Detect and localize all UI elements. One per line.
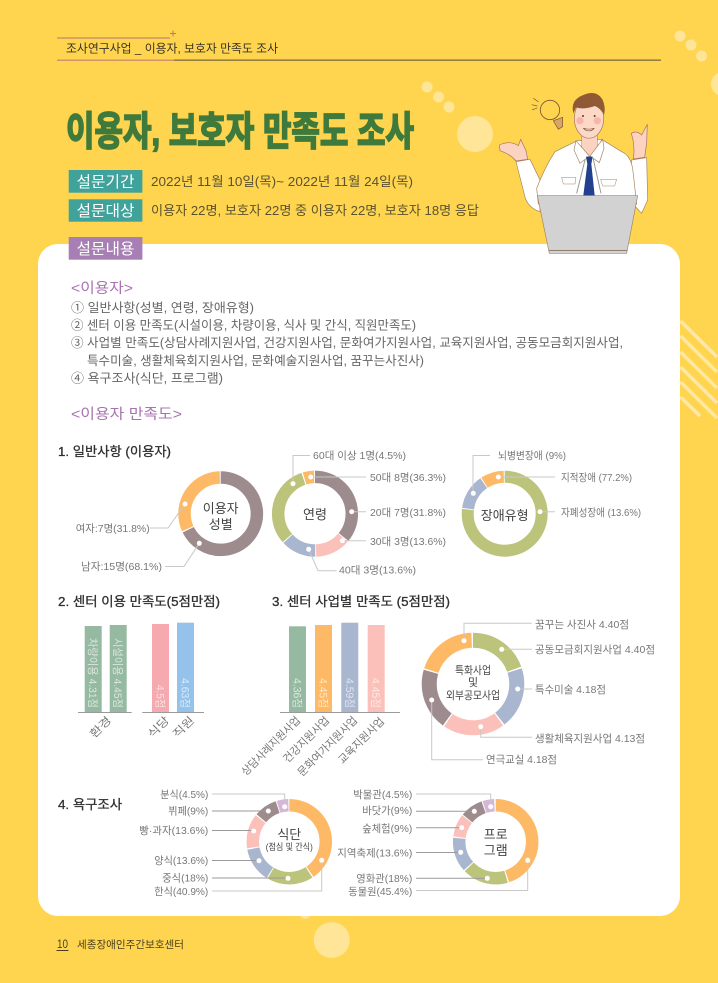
footer: 10 (57, 939, 68, 951)
donut: age: 50대 8명(36.3%) (370, 472, 446, 484)
illustration: man with laptop and light bulb (499, 93, 648, 253)
donut: age: 30대 3명(13.6%) (370, 536, 446, 548)
donut: programs: 동물원(45.4%) (348, 886, 412, 898)
page header: 조사연구사업 _ 이용자, 보호자 만족도 조사 (66, 42, 278, 56)
section 2 heading: 2. 센터 이용 만족도(5점만점) (58, 594, 220, 609)
survey target: 설문대상 (76, 202, 134, 220)
donut: special programs: 외부공모사업 (446, 689, 500, 702)
donut: programs: 박물관(4.5%) (353, 789, 412, 801)
donut: meals: 식단 (277, 827, 301, 842)
section 4 heading: 4. 욕구조사 (58, 797, 122, 812)
bar chart: program satisfaction (239, 623, 400, 779)
donut: special programs: 연극교실 4.18점 (486, 754, 557, 766)
donut: programs: 프로 (484, 827, 508, 842)
bar chart: facility satisfaction: 4.63점 (178, 678, 192, 708)
donut: user gender (76, 478, 257, 573)
donut: age: 40대 3명(13.6%) (339, 564, 416, 576)
bar chart: facility satisfaction: 4.5점 (154, 685, 166, 708)
donut: programs: 바닷가(9%) (362, 805, 412, 817)
bar chart: program satisfaction: 4.36점 (290, 678, 304, 708)
panel: white content card (38, 244, 680, 916)
donut: user gender: 성별 (209, 517, 233, 532)
donut: meals: 중식(18%) (162, 872, 208, 884)
decorative stripes (680, 321, 717, 418)
bar chart: program satisfaction: 4.45점 (369, 678, 382, 708)
donut: disability type: 지적장애 (77.2%) (561, 472, 632, 484)
heading: users: <이용자> (71, 280, 133, 297)
survey period (69, 170, 413, 193)
donut: special programs (429, 619, 655, 766)
donut: age: 60대 이상 1명(4.5%) (313, 450, 406, 462)
heading: user satisfaction: <이용자 만족도> (71, 406, 182, 423)
donut: user gender: 이용자 (203, 501, 239, 516)
bar chart: program satisfaction: 건강지원사업 (281, 714, 332, 766)
donut: programs: 숲체험(9%) (362, 823, 412, 835)
donut: special programs: 공동모금회지원사업 4.40점 (535, 643, 655, 656)
page header (57, 30, 661, 61)
donut: user gender: 남자:15명(68.1%) (81, 561, 162, 573)
footer: 세종장애인주간보호센터 (77, 939, 184, 951)
bar chart: facility satisfaction: 환경 (87, 714, 114, 741)
text block: survey items: ① 일반사항(성별, 연령, 장애유형) (71, 301, 254, 315)
bar chart: facility satisfaction: 시설이용 4.45점 (111, 638, 124, 708)
donut: programs: 그램 (484, 843, 508, 858)
bar chart: facility satisfaction: 직원 (170, 714, 197, 741)
bar chart: program satisfaction: 교육지원사업 (336, 715, 387, 767)
donut: age: 연령 (303, 507, 327, 522)
donut: meals: 양식(13.6%) (154, 855, 208, 867)
donut: special programs: 특화사업 (455, 664, 491, 677)
survey period: 2022년 11월 10일(목)~ 2022년 11월 24일(목) (151, 174, 413, 189)
survey period: 설문기간 (76, 173, 134, 191)
donut: age (278, 450, 446, 576)
donut: meals: 분식(4.5%) (160, 789, 208, 801)
text block: survey items: ② 센터 이용 만족도(시설이용, 차량이용, 식사 및 간식, 직원만족도) (71, 318, 416, 332)
text block: survey items (71, 301, 623, 386)
donut: disability type: 자폐성장애 (13.6%) (561, 507, 641, 519)
text block: survey items: 특수미술, 생활체육회지원사업, 문화예술지원사업, 꿈꾸는사진사) (87, 354, 424, 368)
bar chart: facility satisfaction: 차량이용 4.31점 (86, 638, 99, 708)
text block: survey items: ③ 사업별 만족도(상담사례지원사업, 건강지원사업, 문화여가지원사업, 교육지원사업, 공동모금회지원사업, (71, 336, 623, 350)
donut: meals: 한식(40.9%) (154, 886, 208, 898)
donut: programs: 영화관(18%) (356, 873, 412, 885)
donut: special programs: 특수미술 4.18점 (535, 684, 606, 696)
donut: age: 20대 7명(31.8%) (370, 507, 446, 519)
survey target: 이용자 22명, 보호자 22명 중 이용자 22명, 보호자 18명 응답 (151, 203, 479, 218)
bar chart: program satisfaction: 4.59점 (343, 678, 356, 708)
donut: user gender: 여자:7명(31.8%) (76, 523, 150, 535)
donut: meals: 뷔페(9%) (168, 806, 208, 818)
title: 이용자, 보호자 만족도 조사 (66, 110, 414, 154)
donut: disability type: 장애유형 (481, 508, 529, 523)
donut: special programs: 꿈꾸는 사진사 4.40점 (535, 619, 629, 631)
section 1 heading: 1. 일반사항 (이용자) (58, 444, 171, 459)
survey target (69, 199, 479, 222)
bar chart: program satisfaction: 문화여가지원사업 (295, 714, 360, 779)
donut: special programs: 생활체육지원사업 4.13점 (535, 732, 645, 745)
donut: special programs: 및 (468, 676, 478, 689)
label: survey content (69, 237, 142, 260)
text block: survey items: ④ 욕구조사(식단, 프로그램) (71, 372, 223, 386)
donut: disability type: 뇌병변장애 (9%) (498, 450, 566, 462)
bar chart: program satisfaction: 상담사례지원사업 (239, 714, 303, 778)
section 3 heading: 3. 센터 사업별 만족도 (5점만점) (272, 594, 450, 609)
donut: meals: (점심 및 간식) (266, 841, 313, 852)
donut: disability type (468, 450, 641, 551)
bar chart: facility satisfaction (78, 623, 204, 741)
donut: meals (139, 789, 326, 898)
donut: meals: 빵·과자(13.6%) (139, 825, 208, 837)
donut: programs (337, 789, 532, 898)
bar chart: program satisfaction: 4.45점 (316, 678, 330, 708)
bar chart: facility satisfaction: 식당 (145, 714, 172, 741)
label: survey content: 설문내용 (76, 240, 134, 258)
donut: programs: 지역축제(13.6%) (337, 848, 412, 860)
